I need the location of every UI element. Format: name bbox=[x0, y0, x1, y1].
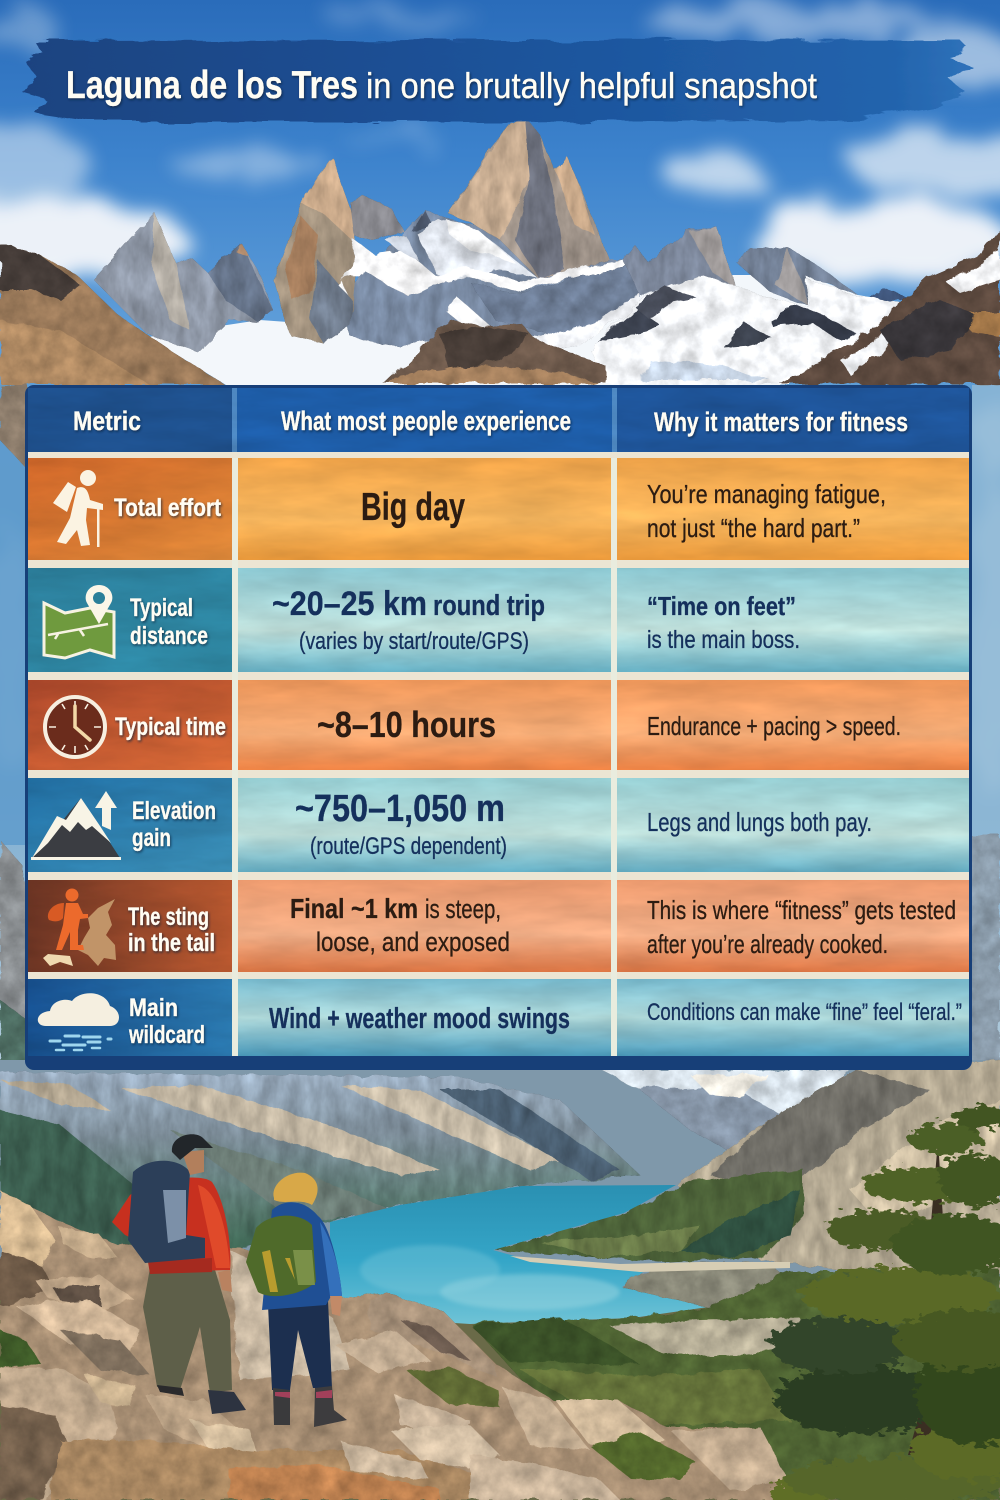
header row bbox=[28, 388, 969, 452]
row: total effort: You’re managing fatigue, bbox=[647, 479, 886, 509]
row: sting in the tail: after you’re already cooked. bbox=[647, 929, 888, 959]
icon: clock bbox=[45, 697, 105, 757]
title text: Laguna de los Tres bbox=[66, 64, 358, 107]
clouds bbox=[0, 2, 1000, 800]
comparison table bbox=[25, 385, 972, 1070]
tree on the right bbox=[770, 1106, 1000, 1500]
row: sting in the tail: Final ~1 km bbox=[290, 893, 418, 924]
row: main wildcard bbox=[28, 979, 969, 1056]
left valley wall bbox=[0, 1072, 640, 1250]
row: sting in the tail: in the tail bbox=[128, 929, 215, 957]
header row: What most people experience bbox=[281, 406, 571, 436]
row: total effort: not just “the hard part.” bbox=[647, 513, 860, 543]
row: elevation gain bbox=[28, 778, 969, 872]
row: total effort bbox=[28, 458, 969, 560]
icon: climber on rock bbox=[43, 888, 116, 966]
header row: Metric bbox=[73, 406, 141, 436]
snow ridges bbox=[338, 217, 640, 352]
row: sting in the tail: The sting bbox=[128, 903, 209, 931]
row: typical distance: distance bbox=[130, 622, 208, 650]
title text: in one brutally helpful snapshot bbox=[366, 65, 817, 106]
row: elevation gain: ~750–1,050 m bbox=[295, 788, 505, 830]
icon: cloud with rain bbox=[38, 993, 119, 1050]
hikers bbox=[112, 1134, 347, 1427]
row: main wildcard: wildcard bbox=[128, 1021, 205, 1049]
valley and distant mountains bbox=[0, 1060, 1000, 1500]
far snowy peaks bbox=[600, 1070, 850, 1155]
snow glacier base bbox=[148, 275, 905, 385]
row: elevation gain: Legs and lungs both pay. bbox=[647, 807, 872, 837]
icon: mountain with up arrow bbox=[31, 791, 121, 860]
row: typical time: Typical time bbox=[115, 713, 226, 741]
right peaks bbox=[623, 227, 908, 307]
sky background bbox=[0, 0, 1000, 1100]
header row: Why it matters for fitness bbox=[654, 407, 908, 437]
title banner bbox=[24, 40, 972, 122]
snow dome and dark rocks bbox=[590, 275, 905, 385]
row: typical time bbox=[28, 680, 969, 770]
icon: hiker bbox=[53, 470, 103, 547]
icon: map with pin bbox=[44, 585, 114, 658]
row: typical time: Endurance + pacing > speed. bbox=[647, 711, 901, 741]
row: main wildcard: Main bbox=[129, 994, 178, 1022]
row: sting in the tail: is steep, bbox=[425, 894, 501, 924]
row: elevation gain: gain bbox=[132, 824, 171, 852]
row: typical time: ~8–10 hours bbox=[317, 704, 496, 745]
main peak bbox=[448, 117, 610, 280]
mountains: Fitz Roy massif bbox=[0, 117, 1000, 385]
row: typical distance: “Time on feet” bbox=[647, 591, 796, 621]
row: typical distance: is the main boss. bbox=[647, 626, 800, 654]
row: elevation gain: Elevation bbox=[132, 797, 216, 825]
right hillside below lake bbox=[470, 1270, 1000, 1500]
row: sting in the tail bbox=[28, 880, 969, 972]
right valley wall bbox=[493, 1060, 1000, 1290]
row: typical distance: round trip bbox=[433, 590, 545, 622]
rocky foreground bbox=[0, 1190, 790, 1500]
row: typical distance: Typical bbox=[130, 594, 193, 622]
row: typical distance bbox=[28, 568, 969, 672]
woman hiker bbox=[246, 1173, 347, 1427]
title text bbox=[66, 64, 817, 107]
row: typical distance: ~20–25 km bbox=[272, 585, 427, 623]
row: total effort: Total effort bbox=[114, 494, 222, 522]
lake bbox=[330, 1185, 800, 1324]
central spire and back rock bbox=[273, 157, 640, 347]
row: total effort: Big day bbox=[361, 486, 465, 529]
row: main wildcard: Wind + weather mood swings bbox=[269, 1003, 570, 1035]
row: sting in the tail: loose, and exposed bbox=[316, 927, 510, 957]
left peaks bbox=[94, 213, 273, 352]
foreground brown ridges bbox=[0, 230, 1000, 385]
row: typical distance: (varies by start/route/GPS) bbox=[299, 628, 529, 655]
side background behind table bbox=[0, 385, 1000, 1075]
man hiker bbox=[112, 1134, 246, 1414]
row: elevation gain: (route/GPS dependent) bbox=[310, 833, 507, 860]
